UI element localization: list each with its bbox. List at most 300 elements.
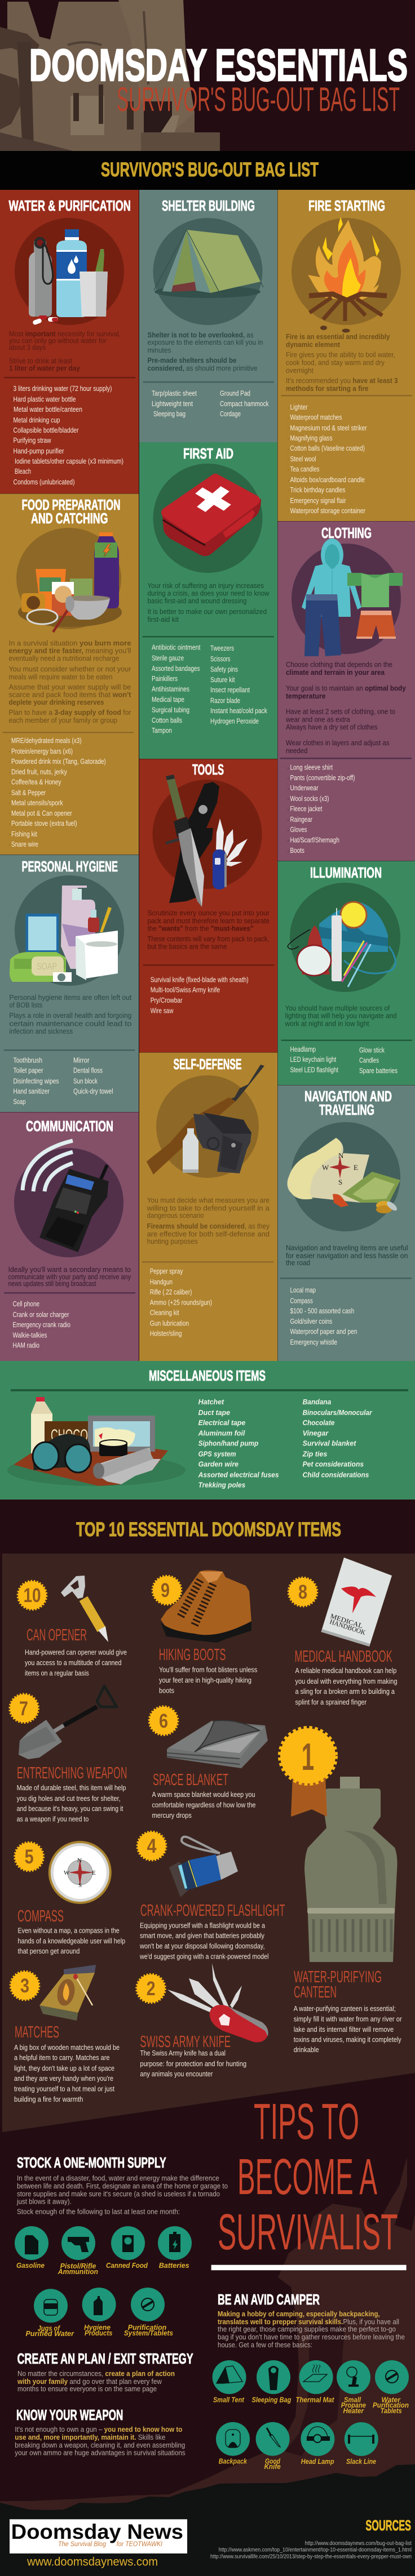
tip: know your weapon bbox=[15, 2406, 186, 2457]
description: you can only go without water for bbox=[9, 336, 107, 345]
description: You must decide what measures you are bbox=[147, 1196, 270, 1204]
item list: left column bbox=[198, 1398, 279, 1489]
description: Navigation and traveling items are useful bbox=[286, 1243, 408, 1252]
item list: Handgun bbox=[150, 1278, 173, 1286]
item list: Raingear bbox=[290, 816, 312, 824]
icon: hygiene products: SOAP bbox=[37, 961, 57, 972]
item list: Rifle (.22 caliber) bbox=[150, 1288, 192, 1296]
description: Made of durable steel, this item will help bbox=[17, 1784, 126, 1792]
icon: ammunition: Ammunition bbox=[58, 2267, 98, 2276]
description: of BOB lists bbox=[9, 1001, 43, 1009]
icon: map, compass, cash and whistle: W bbox=[322, 1163, 329, 1172]
item list: Mirror bbox=[73, 1056, 90, 1064]
item list: Bleach bbox=[15, 468, 31, 475]
description: hands of a knowledgeable user will help bbox=[18, 1937, 125, 1945]
icon: map, compass, cash and whistle: E bbox=[354, 1163, 358, 1172]
description: Equipping yourself with a flashlight would be a bbox=[140, 1922, 265, 1930]
description: temperature bbox=[286, 692, 326, 700]
icon: light sources bbox=[288, 883, 400, 992]
icon: medical handbook: HANDBOOK bbox=[329, 1618, 367, 1636]
badge 3 bbox=[10, 1971, 39, 2000]
description: willing to take to defend yourself in a bbox=[147, 1204, 270, 1212]
description: toxins and viruses, making it completely bbox=[294, 2036, 401, 2044]
item list: Candles bbox=[359, 1057, 379, 1065]
description: Firearms should be considered, as they bbox=[147, 1222, 270, 1230]
item list: right column: Vinegar bbox=[303, 1429, 329, 1438]
item list bbox=[151, 976, 249, 1015]
icon: jugs of water bbox=[26, 2289, 74, 2338]
item list: Waterproof storage container bbox=[290, 507, 365, 515]
description bbox=[285, 1004, 397, 1027]
description: These contents will vary from pack to pack, bbox=[148, 935, 270, 943]
item 8: medical handbook bbox=[288, 1558, 398, 1706]
item list: left column: Electrical tape bbox=[198, 1418, 245, 1427]
item list: left column: Assorted electrical fuses bbox=[198, 1470, 279, 1479]
icon: propane heater: Small bbox=[344, 2395, 361, 2404]
description: months to ensure everyone is on the same page bbox=[17, 2384, 157, 2393]
item list: Disinfecting wipes bbox=[14, 1077, 59, 1085]
badge 10: 10 bbox=[24, 1585, 41, 1607]
item list: Cotton balls bbox=[152, 717, 182, 724]
description bbox=[147, 1196, 270, 1245]
item list: Cleaning kit bbox=[150, 1309, 179, 1317]
description: mercury drops bbox=[152, 1812, 192, 1819]
item list: Sleeping bag bbox=[153, 410, 186, 418]
description: Your risk of suffering an injury increases bbox=[148, 581, 264, 590]
icon: propane heater bbox=[337, 2360, 370, 2415]
icon: hiking boots bbox=[161, 1570, 251, 1643]
item list: Scissors bbox=[210, 655, 230, 663]
item list bbox=[14, 1056, 113, 1106]
item list: Antihistamines bbox=[152, 686, 189, 693]
icon: small tent bbox=[213, 2360, 246, 2404]
description: work at night and in low light bbox=[285, 1019, 369, 1027]
item list: right column: Binoculars/Monocular bbox=[303, 1408, 372, 1417]
icon: thermal mat: Thermal Mat bbox=[295, 2395, 334, 2404]
panel: top 10 items bbox=[2, 1554, 415, 2132]
item list: Tampon bbox=[152, 727, 172, 735]
heading: FOOD PREPARATION bbox=[21, 496, 121, 513]
icon: canned food bbox=[106, 2226, 148, 2270]
panel: shelter building bbox=[139, 190, 277, 442]
item list: Fishing kit bbox=[11, 830, 37, 838]
heading line 2: AND CATCHING bbox=[31, 510, 108, 527]
description: overnight bbox=[286, 366, 314, 375]
description: needed bbox=[286, 746, 308, 755]
description: 1 liter of water per day bbox=[9, 364, 81, 372]
item list bbox=[152, 644, 268, 735]
icon: matchbox bbox=[39, 1965, 96, 2021]
icon: backpack: Backpack bbox=[219, 2457, 248, 2466]
description bbox=[139, 1922, 268, 1961]
badge 6 bbox=[149, 1706, 178, 1735]
badge 7: 7 bbox=[19, 1698, 28, 1720]
description: Scrutinize every ounce you put into your bbox=[148, 909, 270, 917]
icon: gasoline bbox=[15, 2226, 48, 2270]
icon: water tablets: Water bbox=[381, 2395, 401, 2404]
description: It's recommended you have at least 3 bbox=[286, 376, 398, 385]
description: infection and sickness bbox=[9, 1027, 73, 1035]
description: dangerous scenario bbox=[147, 1211, 204, 1220]
icon: water tablets: Tablets bbox=[381, 2406, 402, 2415]
description: during a crisis, as does your need to know bbox=[148, 589, 270, 598]
icon: compass: S bbox=[78, 1882, 82, 1889]
description: splint for a sprained finger bbox=[295, 1698, 367, 1706]
item list: Waterproof paper and pen bbox=[290, 1328, 357, 1336]
icon: propane heater: Propane bbox=[341, 2401, 366, 2409]
icon: compass bbox=[48, 1841, 112, 1904]
description bbox=[294, 2005, 402, 2054]
description bbox=[15, 2425, 186, 2457]
icon: map, compass, cash and whistle bbox=[287, 1122, 400, 1231]
description: light, they don't take up a lot of space bbox=[14, 2065, 114, 2072]
item 5: compass: COMPASS bbox=[17, 1907, 64, 1925]
item list: Dental floss bbox=[73, 1067, 103, 1075]
item list: Survival knife (fixed-blade with sheath) bbox=[151, 976, 249, 984]
illustration: camouflage bug-out bag bbox=[0, 0, 220, 151]
description: Personal hygiene items are often left out bbox=[9, 993, 132, 1002]
icon: batteries: Batteries bbox=[159, 2261, 189, 2270]
badge 4 bbox=[137, 1831, 166, 1861]
item list: Portable stove (extra fuel) bbox=[11, 820, 77, 827]
description bbox=[148, 581, 270, 624]
description: dynamic element bbox=[286, 340, 341, 349]
item 4: crank-powered flashlight: CRANK-POWERED FLASHLIGHT bbox=[140, 1902, 285, 1920]
item list: Sun block bbox=[73, 1077, 98, 1085]
heading: ILLUMINATION bbox=[310, 864, 382, 881]
tip: create a plan bbox=[17, 2350, 193, 2393]
description: climate and terrain in your area bbox=[286, 668, 385, 677]
heading: PERSONAL HYGIENE bbox=[21, 858, 118, 875]
item list: Walkie-talkies bbox=[12, 1332, 47, 1340]
icon: canned food: Canned Food bbox=[106, 2261, 148, 2270]
icon: purification tablets bbox=[124, 2288, 173, 2337]
description: pack and must therefore learn to separate bbox=[148, 916, 270, 925]
description: drinkable bbox=[294, 2046, 319, 2054]
item 9: hiking boots bbox=[152, 1570, 257, 1695]
description bbox=[14, 2044, 120, 2103]
item 10: can opener: CAN OPENER bbox=[27, 1626, 87, 1644]
description: meals will require water to be eaten bbox=[9, 673, 113, 681]
badge 1: 1 bbox=[302, 1736, 314, 1778]
badge 4: 4 bbox=[147, 1835, 157, 1857]
description: Plays a role in overall health and forgoing bbox=[9, 1011, 131, 1020]
description: breaking down a weapon, cleaning it, and even assembling bbox=[15, 2441, 185, 2449]
logo: doomsday news bbox=[10, 2519, 187, 2553]
icon: hygiene products bbox=[82, 2288, 116, 2337]
description: first-aid kit bbox=[148, 615, 179, 624]
icon: clothing set bbox=[292, 539, 403, 656]
item list: Pants (convertible zip-off) bbox=[290, 774, 355, 782]
item list: Hat/Scarf/Shemagh bbox=[290, 837, 339, 844]
icon: hygiene products bbox=[10, 875, 124, 986]
description: Fire gives you the ability to boil water, bbox=[286, 350, 395, 359]
item 10: can opener bbox=[17, 1576, 127, 1678]
item list: Tarp/plastic sheet bbox=[152, 390, 197, 398]
tip: be an avid camper bbox=[213, 2291, 409, 2471]
description bbox=[295, 1667, 398, 1706]
item list: Collapsible bottle/bladder bbox=[14, 426, 79, 434]
icon: medical handbook: MEDICAL bbox=[329, 1612, 364, 1630]
icon: swiss army knife bbox=[167, 1963, 268, 2042]
description: and because it's heavy, you can swing it bbox=[17, 1805, 123, 1813]
item list: Tweezers bbox=[210, 644, 234, 652]
heading: BE AN AVID CAMPER bbox=[218, 2291, 320, 2308]
item list: Steel wool bbox=[290, 455, 316, 463]
description: you deal with everything from making bbox=[295, 1678, 398, 1685]
panel: illumination bbox=[277, 861, 415, 1085]
item list: Assorted bandages bbox=[152, 665, 200, 673]
heading: WATER & PURIFICATION bbox=[9, 197, 131, 214]
description: Your goal is to maintain an optimal body bbox=[286, 684, 406, 692]
item list: Hand-pump purifier bbox=[14, 447, 64, 455]
item list: Underwear bbox=[290, 784, 318, 792]
description bbox=[286, 1243, 408, 1267]
heading: SELF-DEFENSE bbox=[174, 1056, 241, 1073]
item list: Multi-tool/Swiss Army knife bbox=[151, 986, 220, 994]
item list: Antibiotic ointment bbox=[152, 644, 201, 652]
item list: Long sleeve shirt bbox=[290, 764, 333, 772]
description: the right gear, those camping supplies make the perfect to-go bbox=[218, 2325, 396, 2333]
badge 6: 6 bbox=[159, 1710, 168, 1732]
item list: Steel LED flashlight bbox=[290, 1066, 338, 1074]
item list bbox=[150, 1267, 212, 1338]
item list: right column: Survival blanket bbox=[303, 1439, 356, 1448]
item list: left column: Trekking poles bbox=[198, 1480, 245, 1489]
description: A water-purifying canteen is essential; bbox=[294, 2005, 396, 2013]
badge 5 bbox=[15, 1842, 43, 1871]
item list: Hand sanitizer bbox=[14, 1087, 50, 1095]
item list: 3 liters drinking water (72 hour supply) bbox=[14, 385, 112, 393]
description: Have at least 2 sets of clothing, one to bbox=[286, 708, 395, 716]
panel: self-defense bbox=[139, 1052, 277, 1361]
icon: food supplies bbox=[16, 528, 122, 632]
description bbox=[25, 1649, 127, 1678]
icon: gasoline: Gasoline bbox=[16, 2261, 45, 2270]
item list: Pry/Crowbar bbox=[151, 996, 183, 1004]
item list: Magnifying glass bbox=[290, 434, 333, 442]
description: Making a hobby of camping, especially backpacking, bbox=[218, 2310, 380, 2318]
description: eventually need a nutritional recharge bbox=[9, 654, 120, 662]
description: a sling for a broken arm to building a bbox=[295, 1688, 395, 1696]
description: communicate with your party and receive any bbox=[8, 1273, 131, 1281]
description: are effective for both self-defense and bbox=[147, 1230, 270, 1238]
description bbox=[286, 332, 398, 393]
item list: Insect repellant bbox=[210, 686, 250, 694]
description: Most important necessity for survival, bbox=[9, 330, 121, 338]
icon: small tent: Small Tent bbox=[213, 2395, 244, 2404]
heading: TOOLS bbox=[192, 761, 224, 778]
icon: purification tablets: System/Tablets bbox=[124, 2329, 173, 2337]
heading: FIRST AID bbox=[183, 445, 233, 462]
description: that person get around bbox=[18, 1947, 80, 1955]
item list: left column: Garden wire bbox=[198, 1460, 239, 1469]
description: your feet are in high-quality hiking bbox=[159, 1676, 251, 1684]
item list: Tea candles bbox=[290, 465, 319, 473]
description: wear and one as extra bbox=[285, 715, 350, 724]
item list: Safety pins bbox=[210, 666, 238, 674]
item list: Wool socks (x3) bbox=[290, 795, 329, 803]
description bbox=[9, 639, 131, 724]
item list: left column: Duct tape bbox=[198, 1408, 230, 1417]
item list: Cordage bbox=[220, 410, 241, 418]
description: Stock enough of the following to last at least one month: bbox=[17, 2208, 180, 2216]
description: scarce and pack food items that won't bbox=[9, 691, 131, 699]
icon: walkie-talkie bbox=[14, 1141, 123, 1257]
item list: Compact hammock bbox=[220, 400, 269, 408]
icon: folded space blanket bbox=[167, 1720, 268, 1768]
item list: Ground Pad bbox=[220, 390, 250, 398]
icon: flashlight bbox=[169, 1837, 238, 1897]
description: news updates still being broadcast bbox=[8, 1279, 96, 1288]
description: the road bbox=[286, 1258, 310, 1267]
icon: slack line: Slack Line bbox=[346, 2457, 376, 2466]
item 5: compass bbox=[15, 1841, 125, 1955]
description: You should have multiple sources of bbox=[285, 1004, 390, 1012]
item list: Surgical tubing bbox=[152, 706, 189, 714]
badge 8: 8 bbox=[298, 1581, 307, 1603]
icon: sleeping bag bbox=[251, 2360, 291, 2404]
description: Plan to have a 3-day supply of food for bbox=[9, 708, 131, 717]
icon: good knife: Good bbox=[265, 2457, 281, 2466]
description: Shelter is not to be overlooked, as bbox=[148, 331, 254, 339]
item list: Dried fruit, nuts, jerky bbox=[11, 768, 67, 776]
panel: navigation and traveling bbox=[277, 1085, 415, 1361]
description bbox=[17, 1784, 126, 1823]
description: It's not enough to own a gun – you need to know how to bbox=[15, 2425, 182, 2433]
description: we'd suggest going with a crank-powered model bbox=[139, 1953, 268, 1961]
item list: right column: Child considerations bbox=[303, 1470, 369, 1479]
description: building a fire for warmth bbox=[14, 2095, 83, 2103]
description: you access to a multitude of canned bbox=[25, 1659, 122, 1667]
item list bbox=[288, 764, 355, 855]
description: A big box of wooden matches would be bbox=[14, 2044, 120, 2052]
heading: CLOTHING bbox=[321, 524, 372, 541]
item list: right column: Pet considerations bbox=[303, 1460, 364, 1469]
description: It is better to make our own personalized bbox=[148, 607, 267, 616]
description: You must consider whether or not your bbox=[9, 665, 131, 673]
item list: left column: GPS system bbox=[198, 1450, 236, 1458]
description: Ideally you'll want a secondary means to bbox=[8, 1265, 131, 1274]
icon: jugs of water: Jugs of bbox=[38, 2324, 60, 2333]
badge 5: 5 bbox=[25, 1846, 34, 1868]
description: minutes bbox=[148, 346, 171, 354]
description: energy and tire faster, meaning you'll bbox=[9, 647, 131, 655]
icon: hygiene products: Products bbox=[85, 2329, 113, 2337]
description: a helpful item to carry. Matches are bbox=[14, 2054, 109, 2062]
header banner bbox=[0, 0, 415, 151]
description: A warm space blanket would keep you bbox=[152, 1791, 255, 1799]
logo: doomsday news: Doomsday News bbox=[11, 2520, 183, 2543]
badge 3: 3 bbox=[20, 1975, 29, 1997]
item list: LED keychain light bbox=[290, 1056, 337, 1064]
description bbox=[17, 2369, 175, 2393]
item list: $100 - 500 assorted cash bbox=[290, 1307, 354, 1315]
badge 7 bbox=[10, 1694, 38, 1723]
description: use and, more importantly, maintain it. Skills like bbox=[15, 2433, 165, 2441]
item list bbox=[12, 1300, 70, 1350]
icon: first aid kit bbox=[153, 464, 263, 573]
description bbox=[285, 660, 406, 755]
item list: Hydrogen Peroxide bbox=[210, 718, 259, 726]
description: Always have a dry set of clothes bbox=[286, 723, 378, 731]
icon: good knife bbox=[256, 2422, 290, 2471]
item list: MRE/dehydrated meals (x3) bbox=[11, 737, 82, 745]
icon: water tablets: Purification bbox=[373, 2401, 409, 2409]
icon: water tablets bbox=[373, 2360, 409, 2415]
badge 1 bbox=[280, 1727, 336, 1817]
item list: Toilet paper bbox=[14, 1067, 43, 1075]
description: just blows it away). bbox=[16, 2197, 72, 2206]
item list: Emergency crank radio bbox=[12, 1321, 70, 1329]
item list: left column: Aluminum foil bbox=[198, 1429, 245, 1438]
description: Choose clothing that depends on the bbox=[286, 660, 392, 669]
item list: Crank or solar charger bbox=[12, 1311, 69, 1319]
heading: COMMUNICATION bbox=[26, 1118, 113, 1134]
description: for easier navigation and less hassle on bbox=[286, 1251, 408, 1260]
item list: Condoms (unlubricated) bbox=[14, 478, 74, 486]
description: Pre-made shelters should be bbox=[148, 356, 237, 364]
description bbox=[148, 331, 263, 372]
description: you dig holes and cut trees for shelter, bbox=[17, 1795, 121, 1803]
description: certain maintenance could lead to bbox=[9, 1019, 131, 1027]
description bbox=[18, 1927, 125, 1955]
icon: can opener bbox=[61, 1576, 108, 1642]
description: A reliable medical handbook can help bbox=[295, 1667, 396, 1675]
icon: batteries bbox=[158, 2226, 192, 2270]
item list: Salt & Pepper bbox=[11, 789, 46, 797]
item 4: crank-powered flashlight bbox=[137, 1831, 285, 1961]
item list: Lighter bbox=[290, 403, 308, 411]
icon: compass: E bbox=[92, 1870, 96, 1876]
badge 2: 2 bbox=[147, 1978, 156, 2000]
item list: Holster/sling bbox=[150, 1330, 182, 1338]
description: translates well to prepper survival skills.Plus, if you have all bbox=[218, 2317, 399, 2326]
badge 10 bbox=[17, 1581, 47, 1610]
panel: fire starting bbox=[277, 190, 415, 521]
website url: www.doomsdaynews.com bbox=[27, 2556, 158, 2569]
item 9: hiking boots: HIKING BOOTS bbox=[159, 1646, 226, 1664]
item list: right column bbox=[302, 1398, 372, 1479]
icon: jugs of water: Purified Water bbox=[26, 2329, 74, 2338]
description: the "wants" from the "must-haves" bbox=[148, 924, 254, 933]
description: and they are very handy when you're bbox=[14, 2075, 113, 2083]
icon: good knife: Knife bbox=[264, 2462, 281, 2471]
badge 8 bbox=[288, 1577, 317, 1607]
item list: Local map bbox=[290, 1287, 316, 1294]
item list bbox=[290, 1045, 398, 1075]
item list: right column: Bandana bbox=[303, 1398, 331, 1406]
icon: tent bbox=[153, 218, 263, 325]
description: Hand-powered can opener would give bbox=[25, 1649, 127, 1657]
description: store supplies and make sure it's secure (a shed is useless if a tornado bbox=[17, 2190, 220, 2198]
icon: head lamp bbox=[301, 2422, 334, 2466]
panel: personal hygiene bbox=[0, 855, 139, 1112]
description: You'll suffer from foot blisters unless bbox=[159, 1666, 257, 1674]
item list: Toothbrush bbox=[14, 1056, 42, 1064]
logo: doomsday news: The Survival Blog bbox=[58, 2540, 106, 2548]
item list: Iodine tablets/other capsule (x3 minimum) bbox=[15, 457, 123, 465]
item 3: matches bbox=[10, 1965, 120, 2103]
description: Even without a map, a compass in the bbox=[18, 1927, 120, 1935]
item list: Magnesium rod & steel striker bbox=[290, 424, 367, 432]
icon: ammunition bbox=[58, 2226, 98, 2276]
description: purpose: for protection and for hunting bbox=[140, 2060, 246, 2068]
item list: Razor blade bbox=[210, 697, 240, 705]
item 6: space blanket bbox=[149, 1706, 268, 1819]
item list: Spare batteries bbox=[359, 1067, 398, 1075]
description: lake and its internal filter will remove bbox=[294, 2026, 394, 2034]
